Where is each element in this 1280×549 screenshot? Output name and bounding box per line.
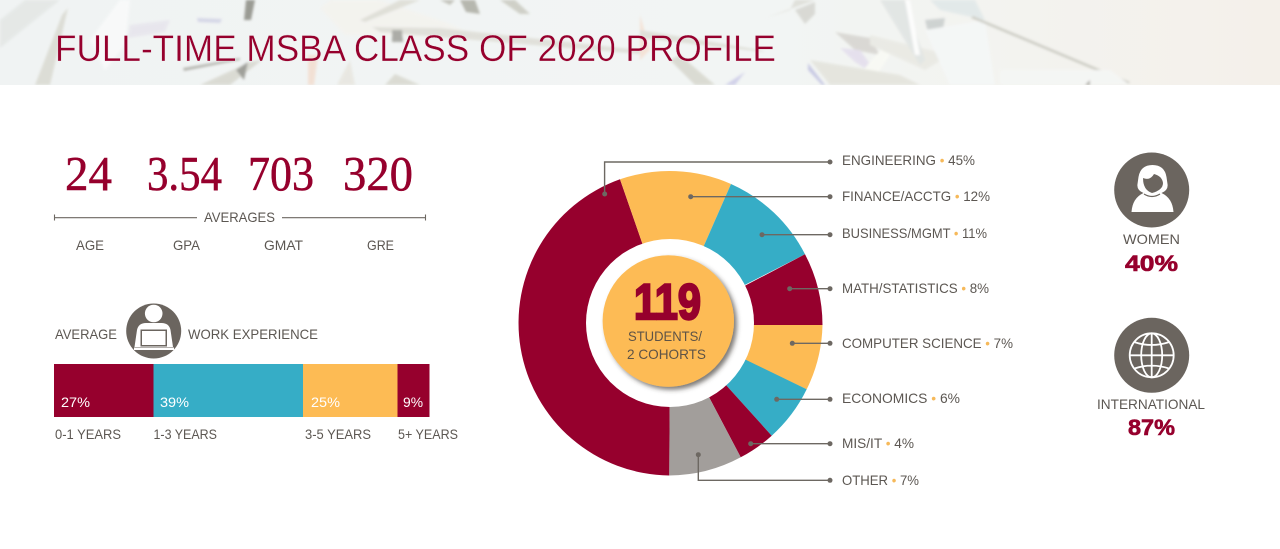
bar value 39%: 39% <box>160 394 189 410</box>
slice: engineering <box>519 179 670 476</box>
center badge: 119 students <box>603 255 734 387</box>
donut hole <box>586 239 754 407</box>
panel: work experience <box>54 304 458 442</box>
label: finance: FINANCE/ACCTG • 12% <box>842 188 990 204</box>
international label: INTERNATIONAL <box>1097 396 1205 412</box>
label: business: BUSINESS/MGMT • 11% <box>842 225 987 241</box>
donut chart: undergraduate majors <box>519 171 822 476</box>
icon: person at laptop <box>126 304 181 358</box>
icon: globe <box>1114 318 1189 393</box>
panel: women stat <box>1114 152 1189 276</box>
stacked bar: 3-5 years <box>303 364 398 417</box>
averages caption: AVERAGES <box>204 209 275 225</box>
label: math: MATH/STATISTICS • 8% <box>842 280 989 296</box>
donut legend labels <box>842 152 1013 488</box>
cohorts caption: 2 COHORTS <box>627 346 706 362</box>
work experience heading left: AVERAGE <box>55 326 117 342</box>
bar value 9%: 9% <box>403 394 423 410</box>
panel: averages <box>54 146 426 253</box>
women value: 40% <box>1125 251 1178 276</box>
title: FULL-TIME MSBA CLASS OF 2020 PROFILE <box>55 28 776 69</box>
bar label 3-5 years: 3-5 YEARS <box>305 426 371 442</box>
slice: finance <box>620 171 731 323</box>
international value: 87% <box>1128 415 1175 440</box>
bar label 1-3 years: 1-3 YEARS <box>154 426 217 442</box>
label: computer science: COMPUTER SCIENCE • 7% <box>842 335 1013 351</box>
bar value 27%: 27% <box>61 394 90 410</box>
age label: AGE <box>76 237 104 253</box>
bar label 5+ years: 5+ YEARS <box>398 426 458 442</box>
bar label 0-1 years: 0-1 YEARS <box>55 426 121 442</box>
slice: computer science <box>670 325 822 389</box>
average GRE value: 320 <box>343 146 413 201</box>
averages bracket line <box>54 214 426 220</box>
label: other: OTHER • 7% <box>842 472 919 488</box>
header banner: crystal sculpture background <box>0 0 1280 85</box>
slice: other <box>669 323 741 476</box>
label: economics: ECONOMICS • 6% <box>842 390 960 406</box>
GMAT label: GMAT <box>264 237 303 253</box>
slice: business <box>670 184 805 323</box>
average age value: 24 <box>65 146 112 201</box>
slice: math <box>670 254 822 325</box>
average GMAT value: 703 <box>248 146 314 201</box>
slice: economics <box>670 323 807 436</box>
students caption: STUDENTS/ <box>628 328 702 344</box>
average GPA value: 3.54 <box>147 146 222 201</box>
bar value 25%: 25% <box>311 394 340 410</box>
panel: international stat <box>1097 318 1205 440</box>
label: MIS/IT: MIS/IT • 4% <box>842 435 914 451</box>
slice: MIS/IT <box>670 323 772 457</box>
icon: woman <box>1114 152 1189 228</box>
student count: 119 <box>634 274 701 330</box>
stacked bar: 0-1 years <box>54 364 154 417</box>
stacked bar: 1-3 years <box>154 364 303 417</box>
GPA label: GPA <box>173 237 201 253</box>
donut leader lines <box>602 160 832 483</box>
work experience heading right: WORK EXPERIENCE <box>188 326 318 342</box>
GRE label: GRE <box>367 237 394 253</box>
women label: WOMEN <box>1123 231 1180 247</box>
stacked bar: 5+ years <box>398 364 430 417</box>
label: engineering: ENGINEERING • 45% <box>842 152 975 168</box>
